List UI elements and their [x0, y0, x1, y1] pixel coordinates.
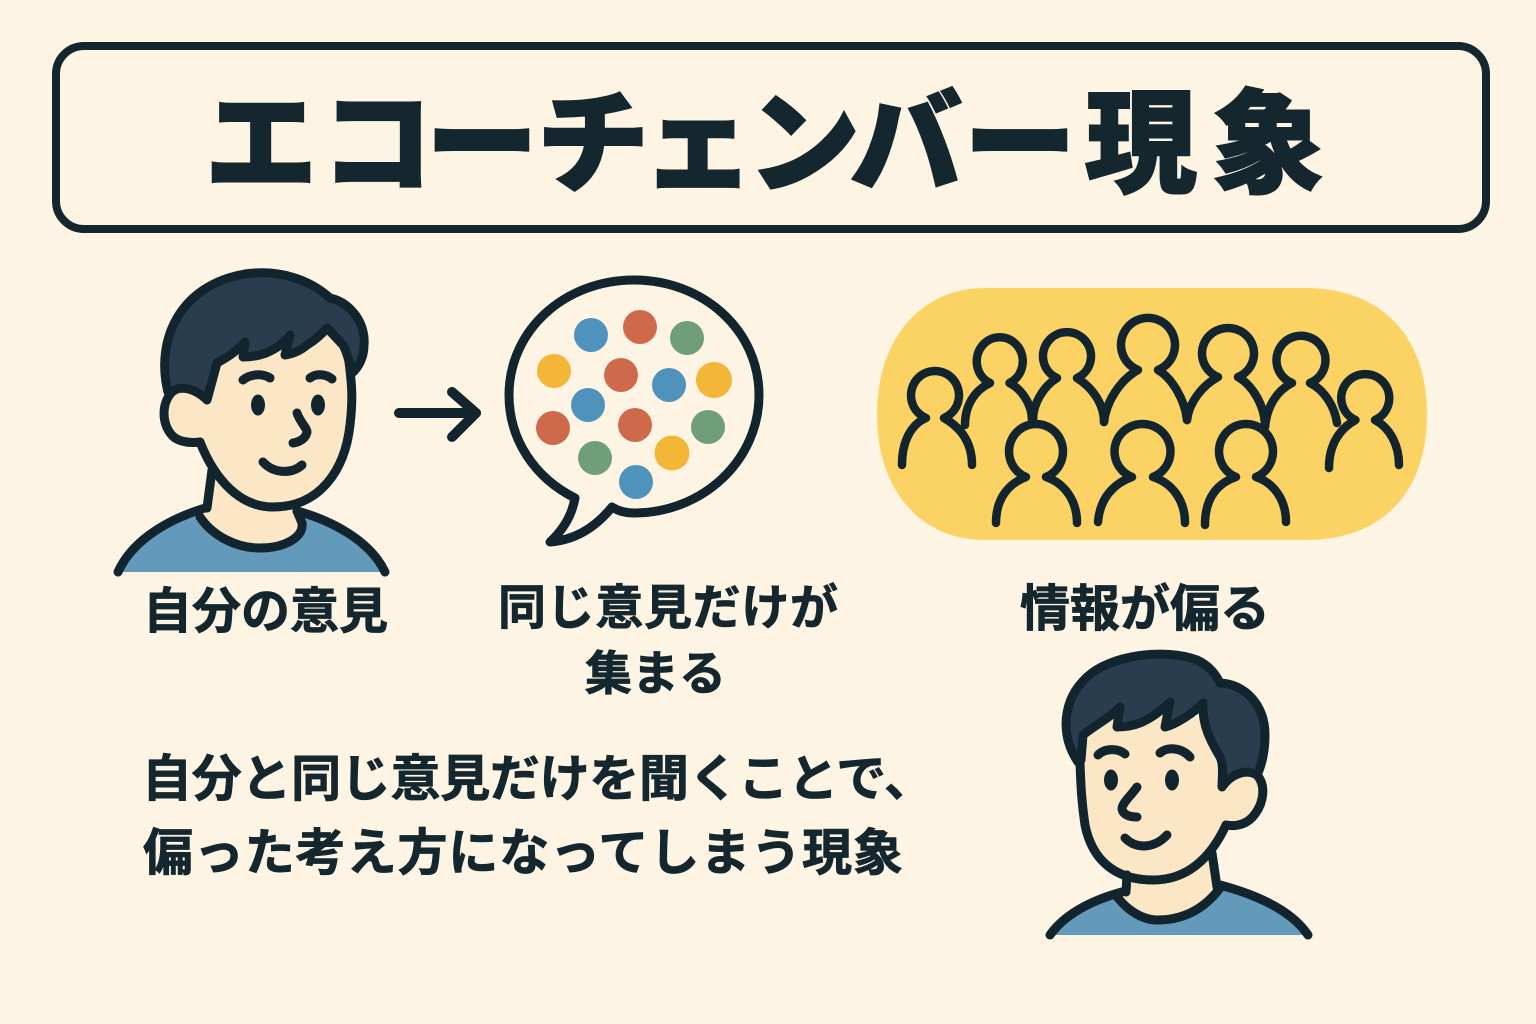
description text [142, 751, 934, 881]
neck [200, 465, 302, 548]
hair [1066, 654, 1265, 787]
eyes [251, 394, 325, 416]
opinion dots [536, 310, 732, 499]
icon: speech bubble with dots [509, 280, 759, 542]
mouth [263, 462, 302, 471]
yellow pill background [877, 288, 1427, 540]
label: information is biased: 情報が偏る [1020, 581, 1270, 637]
neck [1118, 850, 1220, 920]
title banner [56, 46, 1486, 229]
outlines [1050, 654, 1308, 935]
title text: エコーチェンバー現象 [205, 82, 1324, 207]
description text: 自分と同じ意見だけを聞くことで、 [142, 751, 934, 807]
outlines [118, 273, 385, 572]
label: same opinions gather: 同じ意見だけが [498, 582, 838, 635]
eyebrows [1098, 750, 1125, 755]
hair [165, 273, 364, 400]
face and ear [1080, 700, 1262, 880]
icon: person speaking (self) [118, 273, 385, 572]
description text: 偏った考え方になってしまう現象 [143, 825, 903, 881]
icon: crowd on yellow pill [877, 288, 1427, 540]
nose [1122, 787, 1137, 817]
shirt [118, 508, 385, 572]
crowd outlines [902, 318, 1399, 525]
label: own opinion: 自分の意見 [143, 585, 388, 639]
shirt [1050, 888, 1308, 935]
icon: person listening (biased) [1050, 654, 1308, 935]
eyes [1104, 770, 1179, 790]
mouth [1125, 835, 1167, 846]
arrow [399, 392, 476, 437]
label: same opinions gather [498, 582, 838, 700]
nose [293, 413, 307, 443]
ear and face [165, 328, 353, 507]
label: same opinions gather: 集まる [585, 647, 726, 700]
eyebrows [243, 375, 270, 380]
